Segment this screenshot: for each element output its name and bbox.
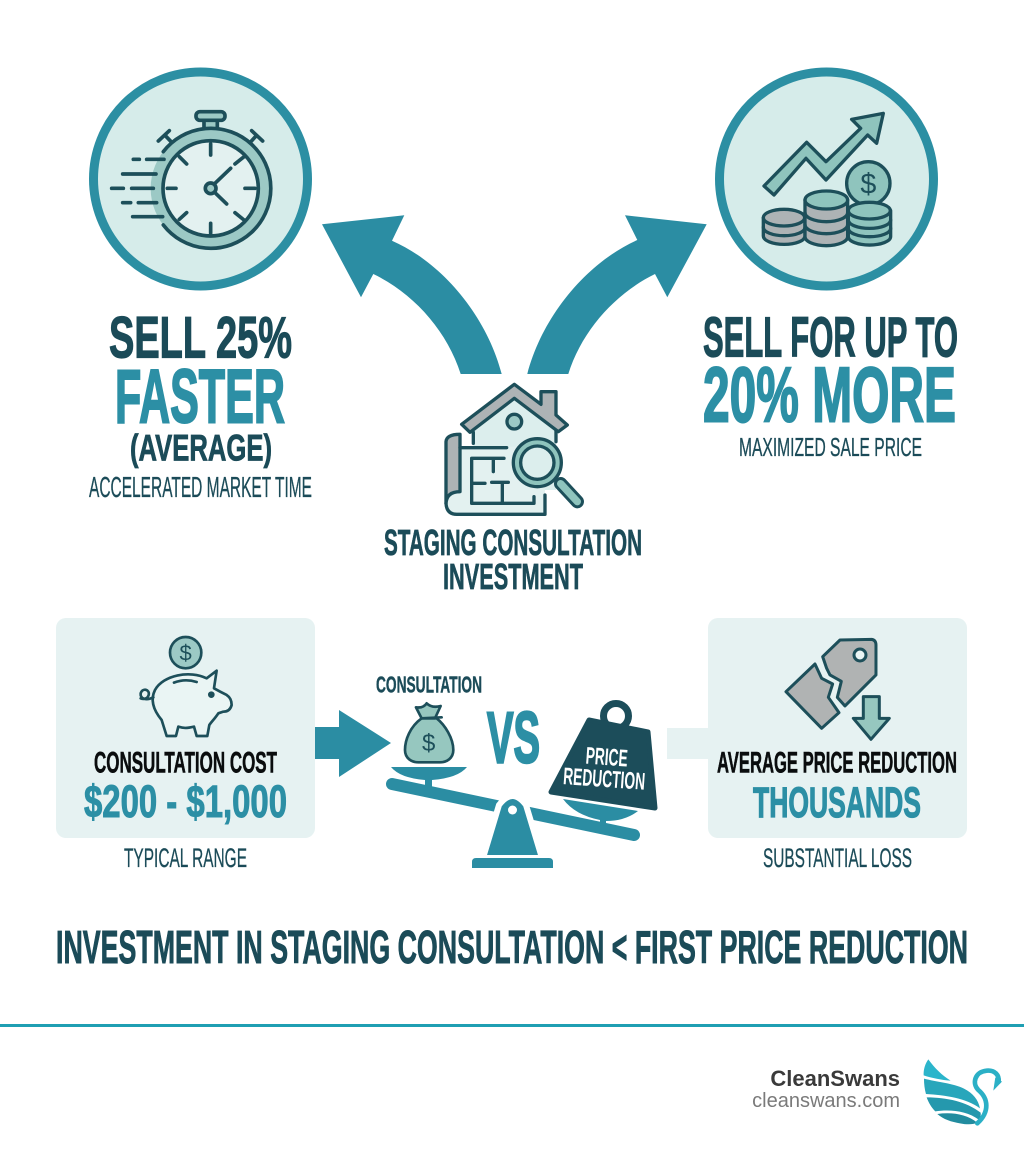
text: consultation label: CONSULTATION (376, 672, 482, 698)
right pan (563, 799, 638, 826)
text: VS: VS (487, 698, 540, 778)
icon: swan logo (924, 1059, 1002, 1124)
panel: average price reduction: THOUSANDS (753, 779, 921, 827)
icon: broken price tag with down arrow (786, 639, 889, 739)
chart: balance scale (391, 703, 655, 868)
text: sell 25% faster: FASTER (115, 354, 285, 440)
beam (392, 784, 634, 835)
icon: weight (551, 704, 655, 808)
arrow: into scale (315, 710, 391, 777)
text: price reduction: PRICE (585, 743, 629, 772)
footer divider (0, 1024, 1024, 1027)
text: staging consultation investment: INVESTMENT (443, 556, 583, 597)
text: sell 25% faster (89, 306, 312, 504)
panel: consultation cost: $200 - $1,000 (84, 776, 287, 827)
text: sell for up to 20% more (703, 306, 958, 462)
arrow: curved up-right (527, 215, 707, 374)
panel: consultation cost (56, 618, 315, 838)
icon: rising chart and coins in circle: $ (860, 168, 876, 200)
panel: average price reduction (708, 618, 967, 838)
arrow: curved up-left (322, 215, 502, 374)
text: typical range: TYPICAL RANGE (124, 843, 247, 873)
icon: piggy bank: $ (180, 641, 192, 666)
icon: stopwatch in circle (94, 72, 308, 286)
text: substantial loss: SUBSTANTIAL LOSS (763, 843, 912, 873)
icon: piggy bank (141, 637, 232, 736)
icon: money bag: $ (422, 730, 435, 757)
text: sell 25% faster: ACCELERATED MARKET TIME (89, 472, 312, 504)
panel: consultation cost: CONSULTATION COST (94, 746, 277, 780)
text: staging consultation investment (384, 522, 642, 597)
fulcrum (472, 796, 553, 868)
text: sell 25% faster: SELL 25% (109, 306, 292, 370)
text: brand: CleanSwans (770, 1066, 900, 1091)
text: brand (752, 1066, 900, 1112)
left pan (391, 767, 467, 789)
text: brand: cleanswans.com (752, 1090, 900, 1112)
text: staging consultation investment: STAGING CONSULTATION (384, 522, 642, 563)
text: price reduction: REDUCTION (562, 763, 646, 796)
text: price reduction (562, 741, 648, 796)
icon: money bag (405, 703, 453, 762)
icon: rising chart and coins in circle (720, 72, 934, 286)
connector: pale bar to right panel (667, 728, 712, 759)
text: sell 25% faster: (AVERAGE) (130, 428, 272, 468)
icon: house blueprint and magnifier (446, 384, 577, 514)
